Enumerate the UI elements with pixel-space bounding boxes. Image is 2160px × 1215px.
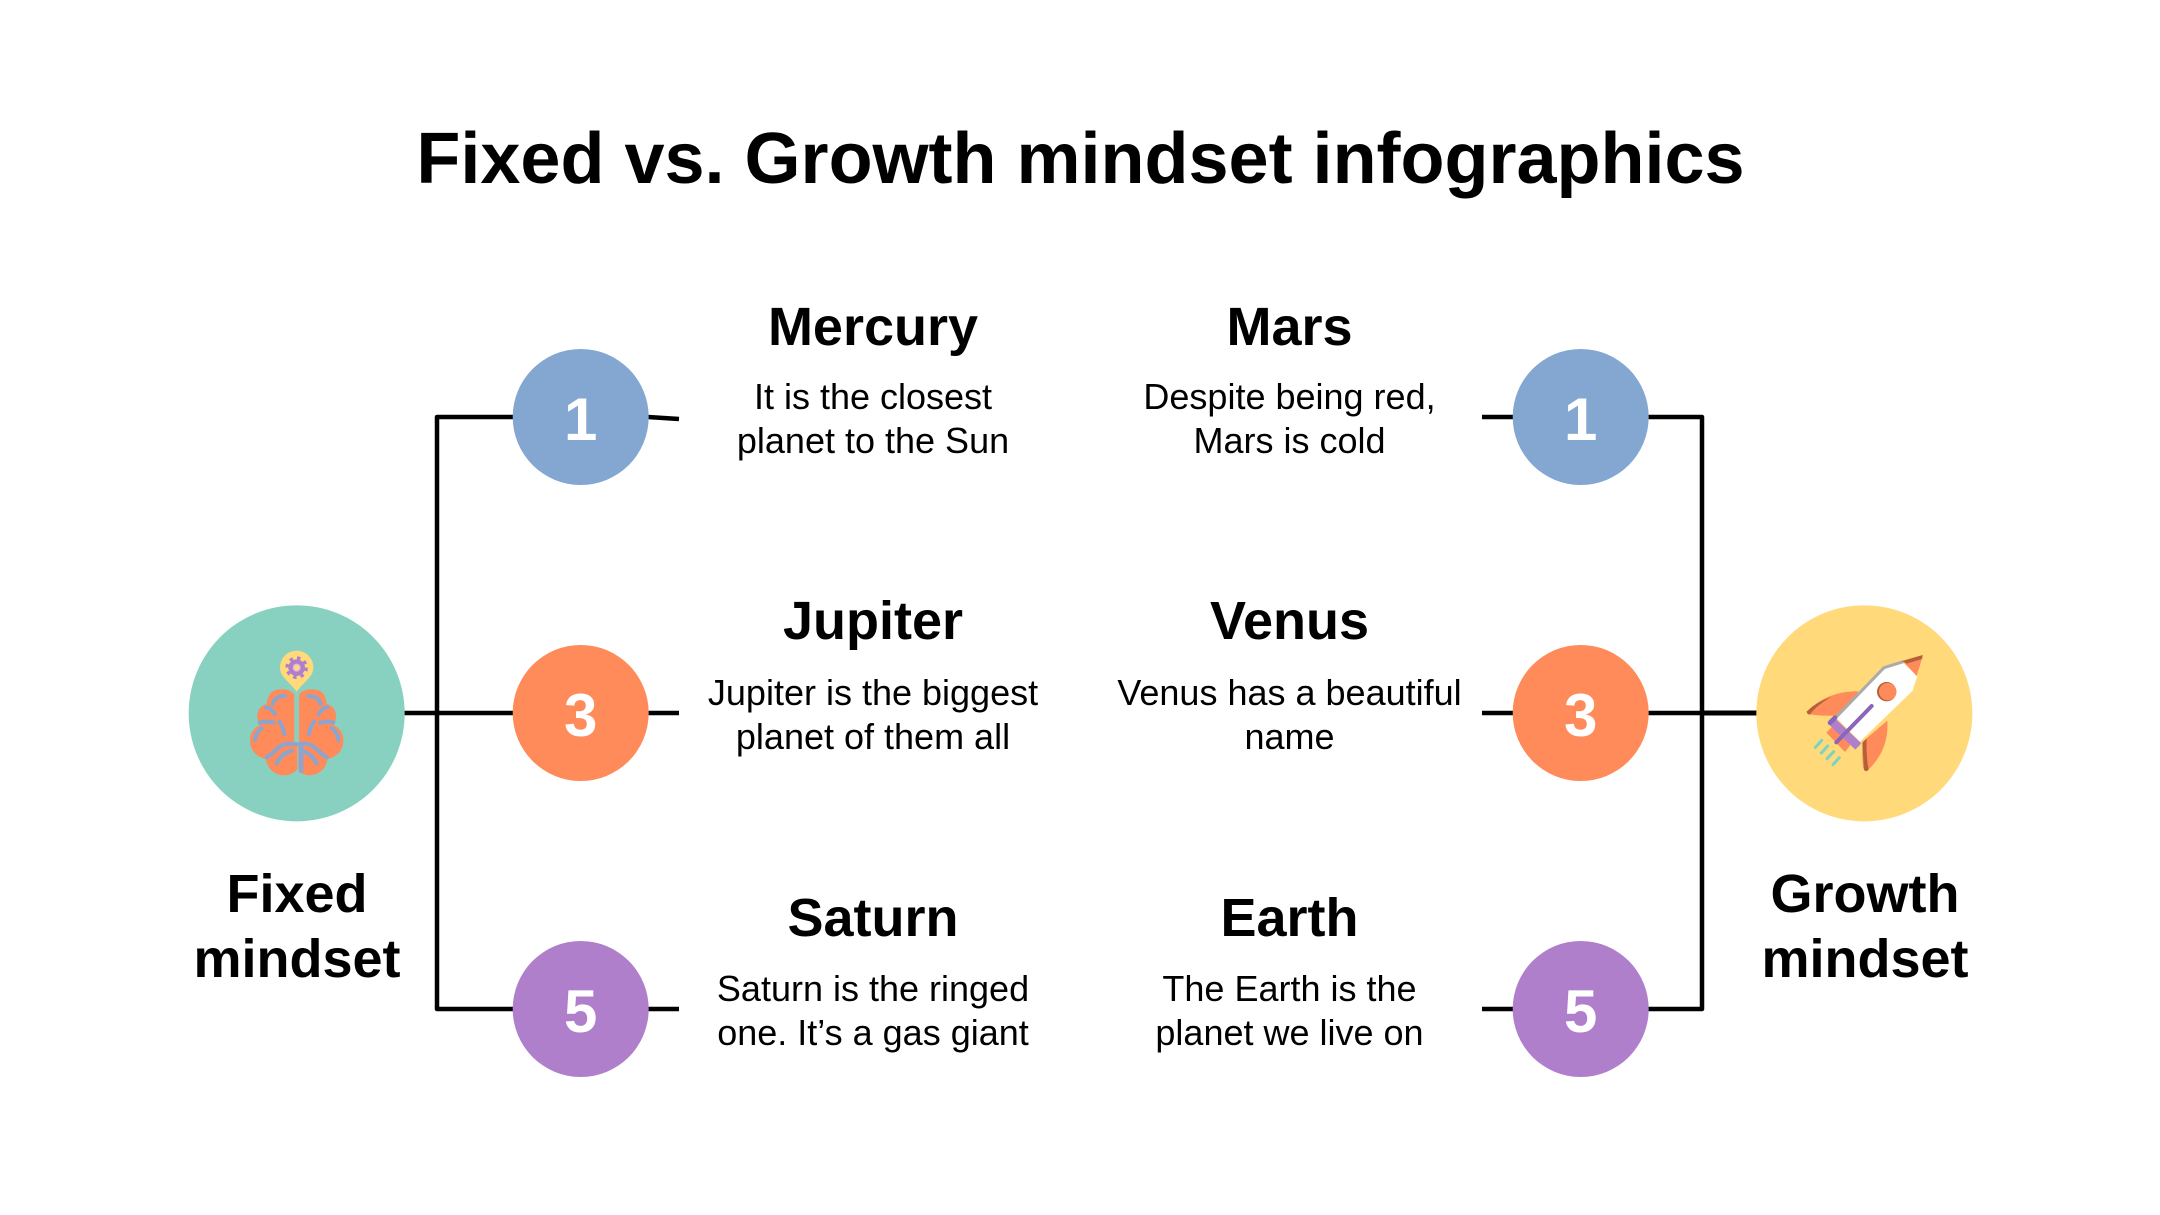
right badge 3: [1513, 645, 1649, 781]
text block: Earth: [1155, 888, 1424, 1053]
left label: Fixed mindset: Fixed: [226, 864, 368, 924]
fixed mindset icon: brain: [189, 605, 405, 821]
text block: Earth: Earth: [1220, 888, 1359, 948]
right badge 1: [1513, 349, 1649, 485]
text block: Earth: planet we live on: [1155, 1012, 1424, 1053]
text block: Venus: [1117, 591, 1462, 757]
text block: Mercury: planet to the Sun: [737, 420, 1009, 461]
text block: Venus: name: [1244, 716, 1335, 757]
text block: Saturn: [717, 888, 1029, 1053]
text block: Earth: The Earth is the: [1162, 968, 1417, 1009]
text block: Mercury: [737, 297, 1009, 461]
text block: Saturn: Saturn is the ringed: [717, 968, 1029, 1009]
left label: Fixed mindset: mindset: [193, 929, 401, 989]
connector lines: right bracket: [1482, 417, 1760, 1009]
text block: Venus: Venus has a beautiful: [1117, 672, 1462, 713]
text block: Mars: [1143, 297, 1436, 461]
left badge 3: 3: [564, 682, 597, 749]
left badge 5: [513, 941, 649, 1077]
right badge 5: [1513, 941, 1649, 1077]
right label: Growth mindset: Growth: [1771, 864, 1959, 924]
left badge 1: [513, 349, 649, 485]
text block: Mercury: Mercury: [768, 297, 978, 357]
text block: Jupiter: Jupiter: [783, 591, 963, 651]
text block: Jupiter: [708, 591, 1038, 757]
text block: Mars: Despite being red,: [1143, 376, 1436, 417]
title: Fixed vs. Growth mindset infographics: [416, 119, 1745, 199]
left badge 5: 5: [564, 978, 597, 1045]
growth mindset icon: rocket: [1756, 605, 1972, 821]
text block: Jupiter: planet of them all: [736, 716, 1010, 757]
text block: Saturn: one. It’s a gas giant: [717, 1012, 1029, 1053]
connector lines: left bracket: [400, 417, 679, 1009]
text block: Mars: Mars is cold: [1193, 420, 1386, 461]
left badge 1: 1: [564, 386, 597, 453]
text block: Venus: Venus: [1210, 591, 1369, 651]
text block: Mars: Mars: [1226, 297, 1353, 357]
text block: Jupiter: Jupiter is the biggest: [708, 672, 1038, 713]
left badge 3: [513, 645, 649, 781]
right badge 5: 5: [1564, 978, 1597, 1045]
right label: Growth mindset: mindset: [1761, 929, 1969, 989]
right badge 3: 3: [1564, 682, 1597, 749]
text block: Saturn: Saturn: [787, 888, 959, 948]
right badge 1: 1: [1564, 386, 1597, 453]
text block: Mercury: It is the closest: [754, 376, 992, 417]
